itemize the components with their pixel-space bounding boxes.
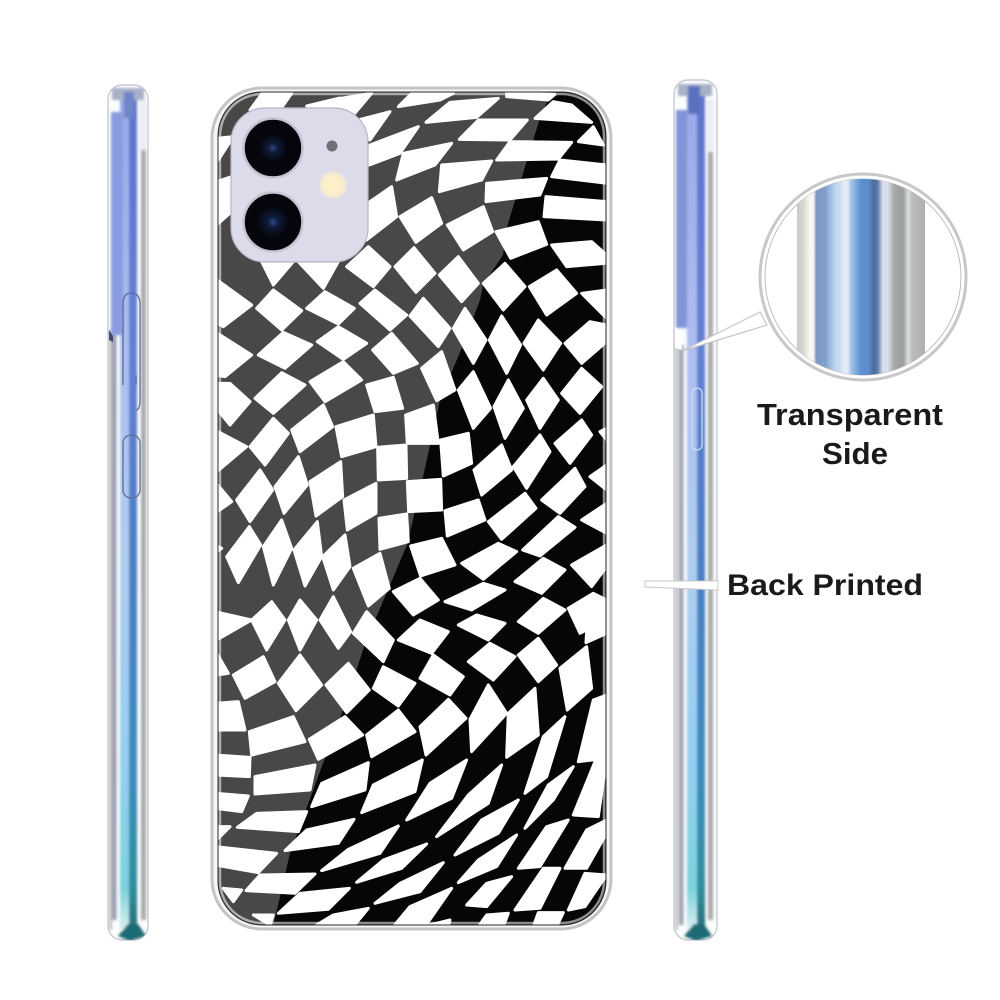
side buttons xyxy=(123,293,140,498)
cells above and beside camera xyxy=(217,93,343,225)
label: transparent side: Transparent xyxy=(757,397,943,432)
lower cells xyxy=(215,597,607,927)
arrow: back printed pointer xyxy=(645,581,718,590)
phone frame xyxy=(212,88,611,929)
label: transparent side: Side xyxy=(822,436,888,471)
cells below camera xyxy=(262,262,338,288)
label: transparent side xyxy=(757,397,943,471)
icon: upper lens xyxy=(244,118,302,178)
left side view of phone case xyxy=(108,85,148,941)
magnifier ring xyxy=(760,174,966,380)
upper right cells xyxy=(337,93,607,318)
icon: microphone xyxy=(326,140,338,152)
magnified stripes xyxy=(797,175,925,379)
side button xyxy=(692,388,702,450)
label: back printed: Back Printed xyxy=(727,569,923,602)
callout: magnified transparent side xyxy=(682,174,966,380)
icon: flash xyxy=(319,171,347,199)
right side view of phone case xyxy=(674,80,717,941)
callout pointer xyxy=(682,312,767,351)
wavy checkerboard print xyxy=(215,90,608,927)
middle cells xyxy=(215,278,607,633)
phone back with checker print xyxy=(212,88,611,929)
case inner edge xyxy=(218,92,606,925)
camera module xyxy=(231,108,368,262)
icon: lower lens xyxy=(244,192,302,252)
